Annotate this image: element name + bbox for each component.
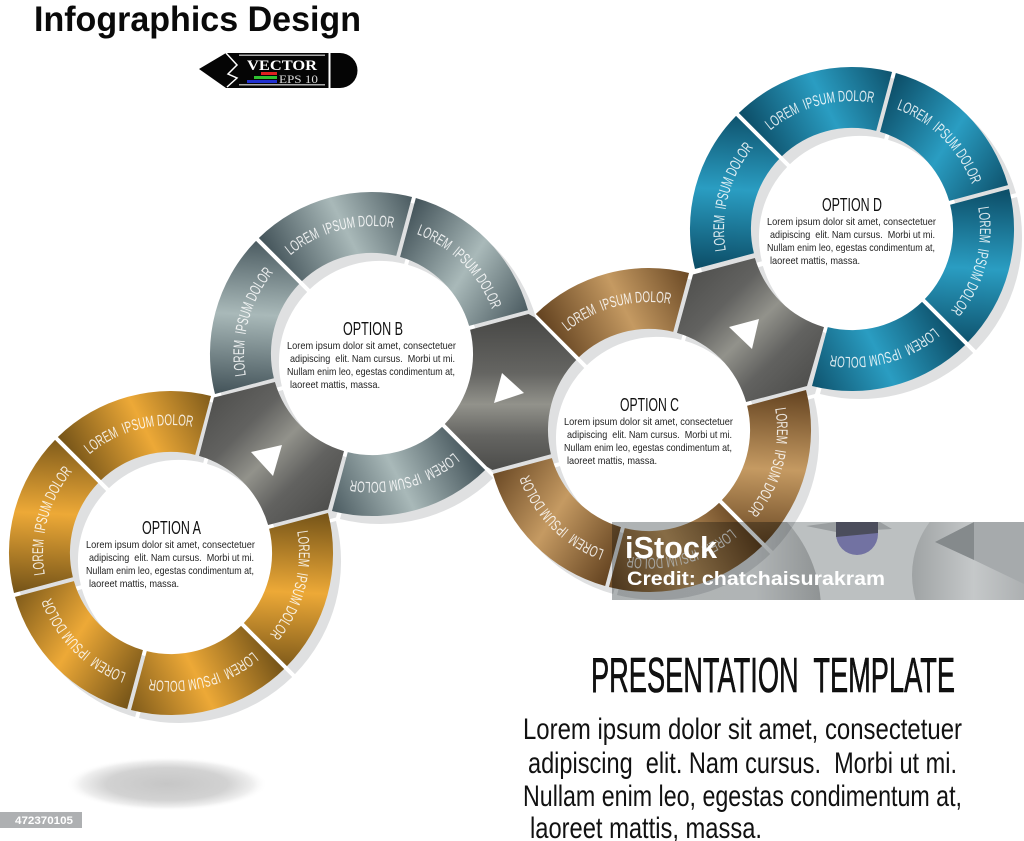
ring: option A: LOREM IPSUM DOLOR bbox=[32, 466, 72, 576]
ring: option A: LOREM IPSUM DOLOR bbox=[270, 530, 310, 640]
image id tag bbox=[0, 812, 82, 828]
ring: option A: LOREM IPSUM DOLOR bbox=[83, 414, 193, 454]
ring: option A: LOREM IPSUM DOLOR bbox=[149, 652, 259, 692]
text: option A: adipiscing elit. Nam cursus. Morbi ut mi. bbox=[89, 552, 254, 564]
ring: option C: LOREM IPSUM DOLOR bbox=[748, 408, 788, 517]
text: option A: OPTION A bbox=[142, 518, 201, 538]
ring: option C: LOREM IPSUM DOLOR bbox=[561, 291, 671, 331]
text: option D: Nullam enim leo, egestas condimentum at, bbox=[767, 242, 935, 254]
text: option B: laoreet mattis, massa. bbox=[290, 379, 380, 391]
watermark text: iStock: iStock bbox=[625, 530, 718, 565]
text: option C: OPTION C bbox=[620, 395, 679, 415]
badge: vector eps 10 pencil: EPS 10 bbox=[279, 74, 318, 86]
watermark band bbox=[612, 522, 1024, 600]
text block: body copy bbox=[523, 713, 962, 841]
text: option B: Lorem ipsum dolor sit amet, consectetuer bbox=[287, 340, 456, 352]
ring: option A bbox=[8, 391, 334, 715]
arrow: B to C bbox=[494, 373, 524, 403]
text: option A: Lorem ipsum dolor sit amet, consectetuer bbox=[86, 539, 255, 551]
text: option A: laoreet mattis, massa. bbox=[89, 578, 179, 590]
ring: option B: LOREM IPSUM DOLOR bbox=[350, 453, 460, 493]
text: option B: Nullam enim leo, egestas condimentum at, bbox=[287, 366, 455, 378]
ring: option B: LOREM IPSUM DOLOR bbox=[417, 224, 501, 309]
ring: option D: LOREM IPSUM DOLOR bbox=[764, 90, 874, 130]
ring: option B bbox=[210, 192, 528, 516]
text: option B: OPTION B bbox=[343, 319, 403, 339]
text: option C: laoreet mattis, massa. bbox=[567, 455, 657, 467]
text: option A: Nullam enim leo, egestas condimentum at, bbox=[86, 565, 254, 577]
text: option A bbox=[86, 518, 255, 590]
text: option C bbox=[564, 395, 733, 467]
text: option D: OPTION D bbox=[822, 195, 882, 215]
text: option C: Lorem ipsum dolor sit amet, consectetuer bbox=[564, 416, 733, 428]
connector: C to D bbox=[677, 258, 824, 402]
text: option D: laoreet mattis, massa. bbox=[770, 255, 860, 267]
ring: option D: LOREM IPSUM DOLOR bbox=[897, 99, 981, 184]
ring: option A: LOREM IPSUM DOLOR bbox=[42, 598, 126, 683]
ring: option D bbox=[690, 67, 1014, 391]
ring: option B: LOREM IPSUM DOLOR bbox=[284, 215, 394, 255]
badge: vector eps 10 pencil: VECTOR bbox=[247, 58, 317, 74]
ring: option C: LOREM IPSUM DOLOR bbox=[627, 529, 736, 569]
arrow: C to D bbox=[729, 319, 759, 349]
ring: option B: LOREM IPSUM DOLOR bbox=[233, 267, 273, 376]
text: option D: Lorem ipsum dolor sit amet, consectetuer bbox=[767, 216, 936, 228]
title: Infographics Design bbox=[34, 0, 361, 39]
text: option B: adipiscing elit. Nam cursus. Morbi ut mi. bbox=[290, 353, 455, 365]
text: option C: Nullam enim leo, egestas condimentum at, bbox=[564, 442, 732, 454]
text: option C: adipiscing elit. Nam cursus. Morbi ut mi. bbox=[567, 429, 732, 441]
ring: option D: LOREM IPSUM DOLOR bbox=[830, 328, 940, 368]
connector: B to C bbox=[445, 314, 576, 470]
image id tag: 472370105 bbox=[15, 815, 73, 827]
arrow: A to B bbox=[251, 445, 282, 476]
watermark text: credit: Credit: chatchaisurakram bbox=[627, 569, 885, 590]
ring: option C: LOREM IPSUM DOLOR bbox=[520, 474, 604, 560]
text: option D: adipiscing elit. Nam cursus. Morbi ut mi. bbox=[770, 229, 935, 241]
text: option B bbox=[287, 319, 456, 391]
connector: A to B bbox=[199, 382, 344, 525]
badge: vector eps 10 pencil bbox=[199, 52, 358, 88]
ring: option C bbox=[493, 231, 866, 592]
ground shadow bbox=[66, 757, 268, 811]
ring: option D: LOREM IPSUM DOLOR bbox=[950, 206, 991, 316]
ring: option D: LOREM IPSUM DOLOR bbox=[713, 142, 754, 252]
text: option D bbox=[767, 195, 936, 267]
